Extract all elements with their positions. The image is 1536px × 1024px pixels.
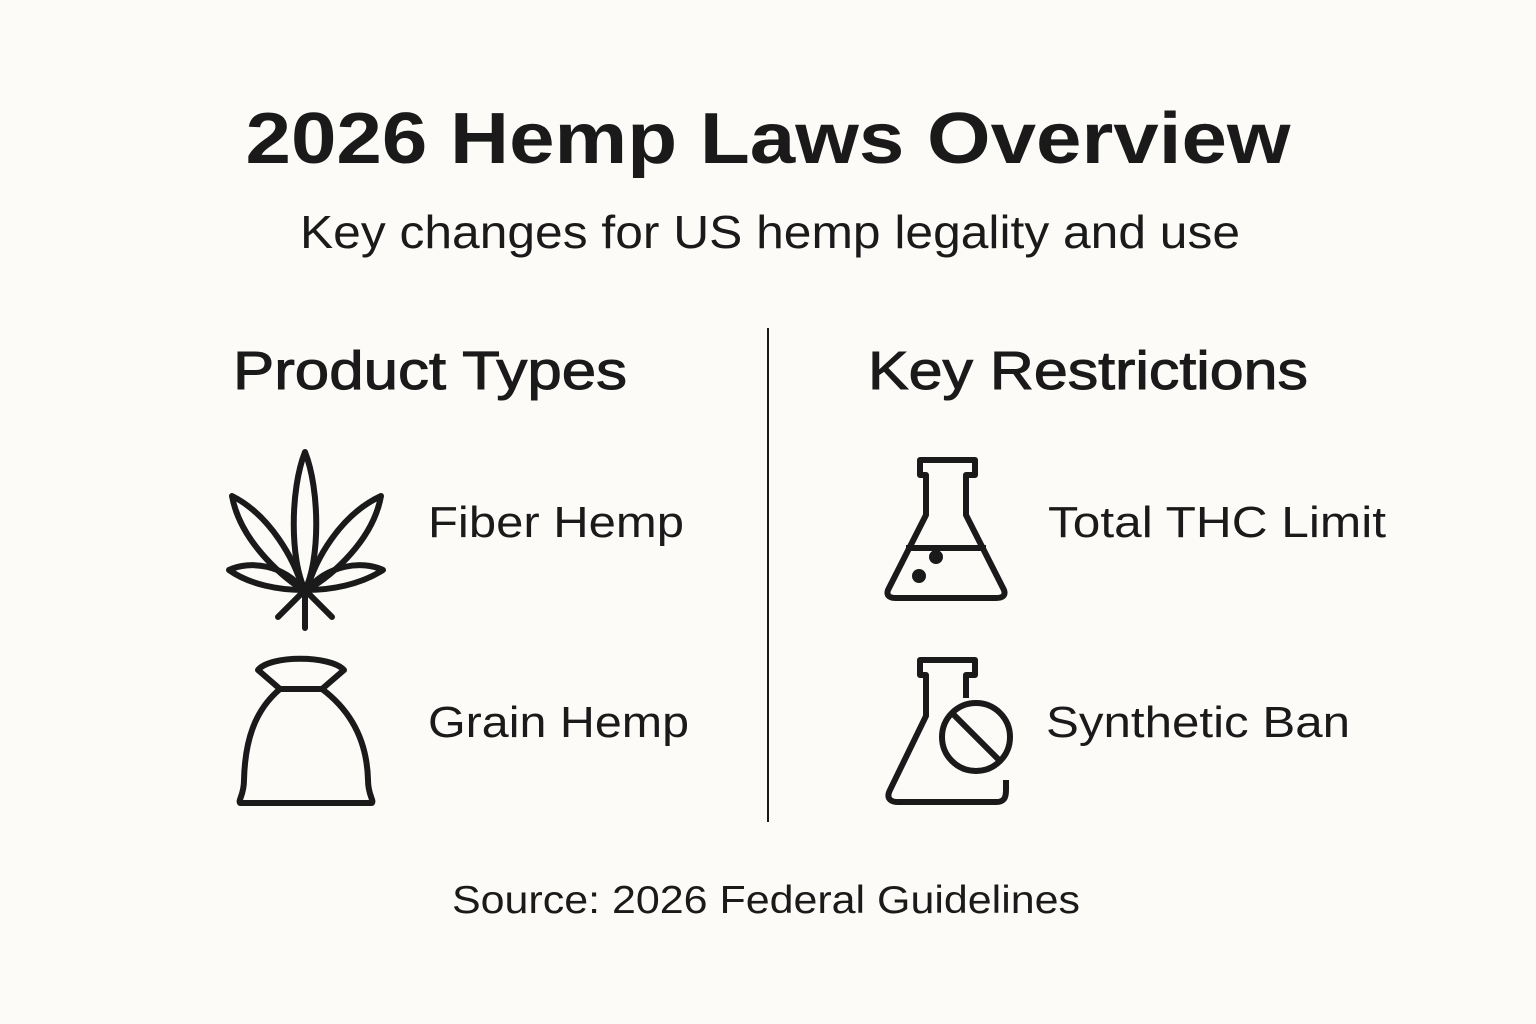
label: fiber hemp: Fiber Hemp [428,498,684,547]
icon: hemp leaf [229,452,383,628]
label: synthetic ban: Synthetic Ban [1046,698,1350,747]
icon: flask with ban [888,660,1010,802]
source note: Source: 2026 Federal Guidelines [452,879,1080,922]
title: 2026 Hemp Laws Overview [246,99,1292,179]
subtitle: Key changes for US hemp legality and use [300,206,1240,258]
label: total THC limit: Total THC Limit [1048,498,1386,547]
icon: flask [887,460,1005,598]
heading: key restrictions: Key Restrictions [868,341,1308,401]
heading: product types: Product Types [233,341,627,401]
label: grain hemp: Grain Hemp [428,698,689,747]
icon: grain sack [240,659,372,803]
